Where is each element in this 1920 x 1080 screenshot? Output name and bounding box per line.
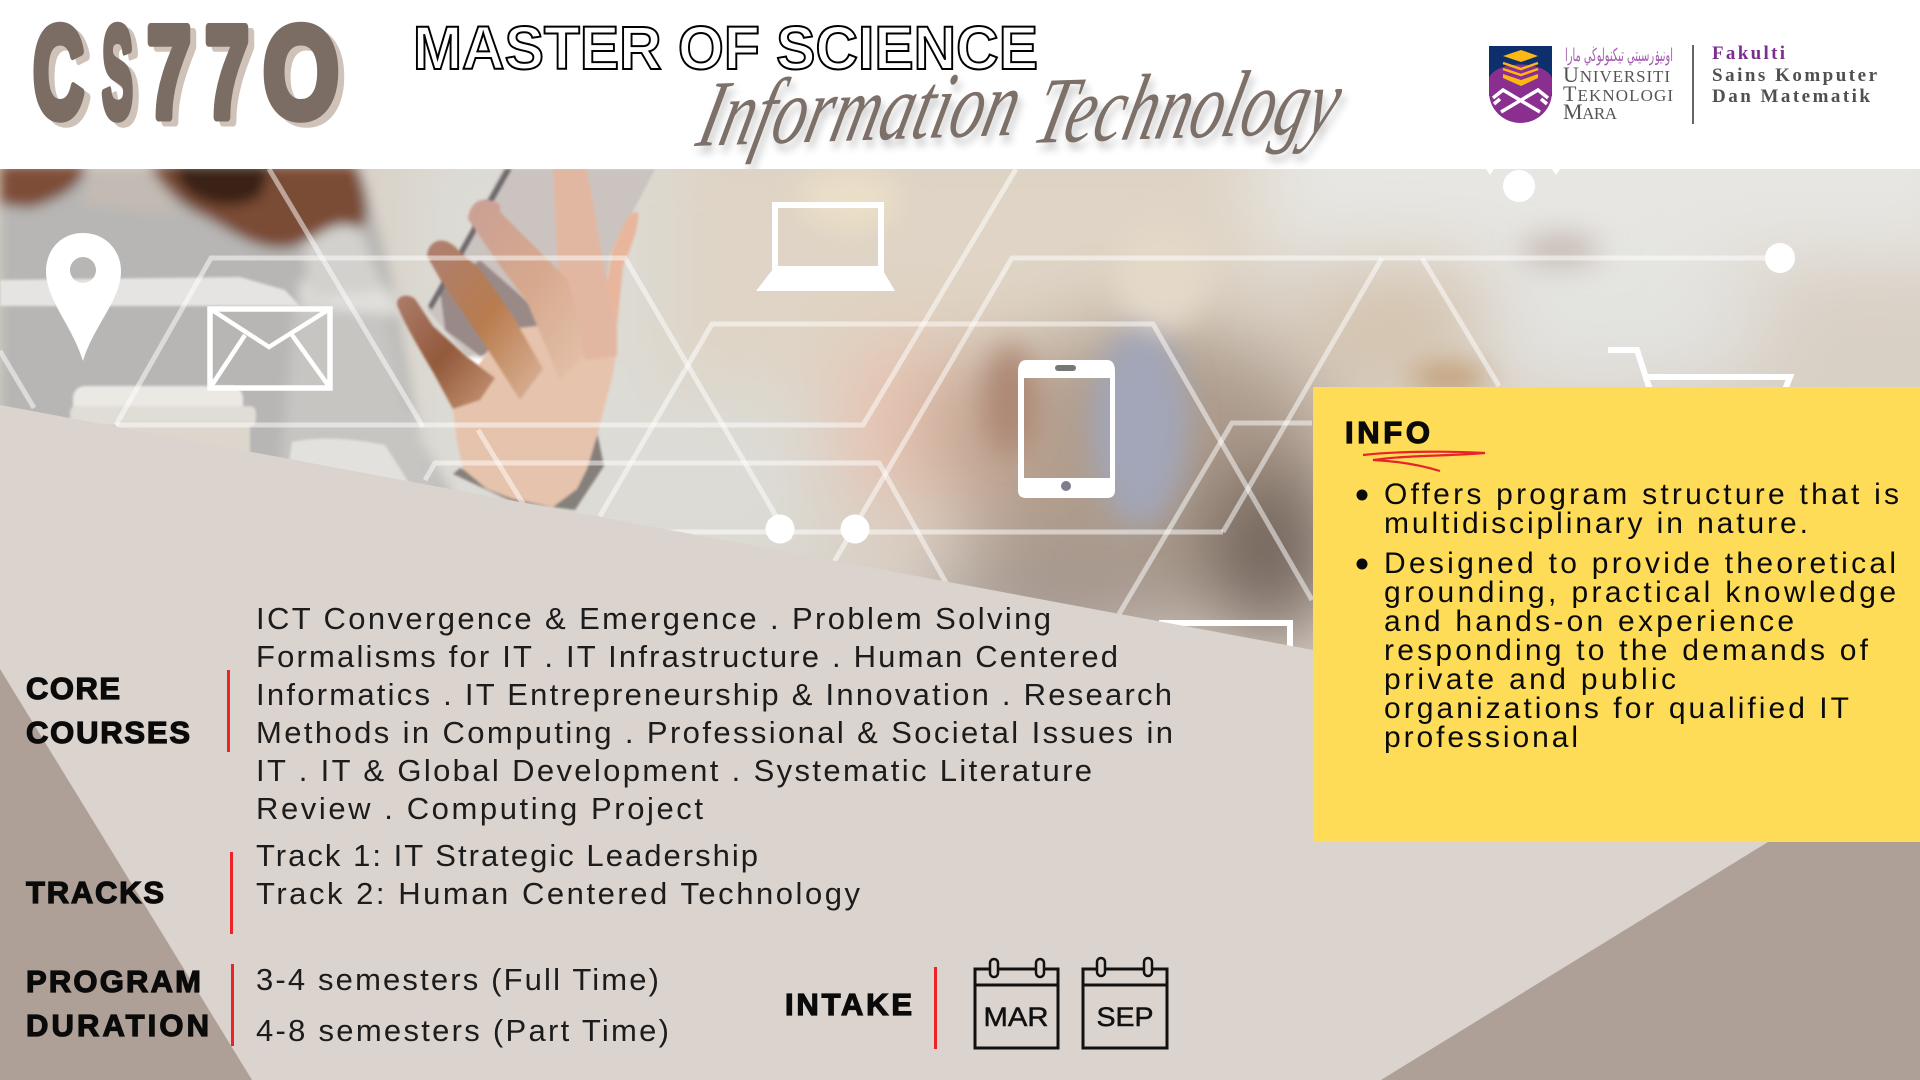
faculty name <box>1712 43 1878 107</box>
code title: CS770: 7 <box>205 0 249 145</box>
duration list: 3-4 semesters (Full Time) <box>256 962 659 997</box>
code title: CS770: S <box>102 0 133 145</box>
code title: CS770: 7 <box>147 0 191 145</box>
heading: program duration: PROGRAM <box>26 964 201 999</box>
sleeve cuff <box>453 432 604 510</box>
icon: calendar September: SEP <box>1096 1002 1154 1032</box>
heading: core courses: COURSES <box>26 715 190 750</box>
logo: UiTM and faculty <box>1489 43 1878 124</box>
faculty name: Sains Komputer <box>1712 65 1878 86</box>
scribble underline <box>1363 452 1485 471</box>
title: Information Technology: Technology <box>1025 48 1353 164</box>
icon: hidden screen <box>1159 620 1293 646</box>
course list <box>256 601 1173 826</box>
section: core courses <box>26 601 1173 826</box>
course list: IT . IT & Global Development . Systematic Literature <box>256 753 1092 788</box>
code title: CS770: C <box>39 4 90 150</box>
panel: dark triangle left <box>0 669 252 1080</box>
heading: program duration: DURATION <box>26 1008 209 1043</box>
code title: CS770: O <box>263 0 339 145</box>
panel: info box <box>1313 387 1920 842</box>
coffee cup <box>69 384 257 452</box>
bullet one <box>1356 478 1899 540</box>
section: tracks <box>26 838 860 934</box>
bullet one: multidisciplinary in nature. <box>1384 507 1808 540</box>
sweater and hair <box>0 169 453 490</box>
bullet one: Offers program structure that is <box>1384 478 1899 511</box>
panel: beige background <box>0 405 1920 1080</box>
university name in Arabic: اونيۏرسيتي تيكنولوڬي مارا <box>1565 45 1673 66</box>
network lines <box>0 169 1780 620</box>
code title: CS770: O <box>269 4 345 150</box>
icon: location pin <box>46 233 121 361</box>
code title: CS770 <box>33 0 345 150</box>
bullet two: grounding, practical knowledge <box>1384 576 1896 609</box>
icon: UiTM shield <box>1489 46 1552 123</box>
heading: core courses: CORE <box>26 671 120 706</box>
heading: tracks: TRACKS <box>26 875 164 910</box>
university name: TEKNOLOGI <box>1563 81 1673 106</box>
course list: Methods in Computing . Professional & Societal Issues in <box>256 715 1173 750</box>
title: Information Technology: Information <box>688 51 1033 167</box>
photo: hand with phone and network overlay <box>0 169 1920 650</box>
code title: CS770: S <box>108 4 139 150</box>
heading: info: INFO <box>1345 415 1430 450</box>
bullet two: organizations for qualified IT <box>1384 692 1849 725</box>
university name <box>1563 62 1673 124</box>
bullet two: Designed to provide theoretical <box>1384 547 1896 580</box>
university name: UNIVERSITI <box>1563 62 1670 87</box>
hand <box>397 169 638 510</box>
duration list: 4-8 semesters (Part Time) <box>256 1013 669 1048</box>
duration list <box>256 962 669 1048</box>
icon: calendar March <box>975 959 1058 1048</box>
section: program duration <box>26 962 669 1048</box>
code title: CS770: C <box>33 0 84 145</box>
header band <box>0 0 1920 169</box>
bullet two <box>1356 547 1896 754</box>
bullet two: responding to the demands of <box>1384 634 1869 667</box>
panel: dark triangle right <box>1381 842 1920 1080</box>
course list: ICT Convergence & Emergence . Problem Solving <box>256 601 1051 636</box>
faculty name: Dan Matematik <box>1712 86 1870 107</box>
bullet two: and hands-on experience <box>1384 605 1794 638</box>
icon: calendar September <box>1083 958 1167 1048</box>
code title: CS770: 7 <box>211 4 255 150</box>
track list <box>256 838 860 911</box>
blurred background <box>400 169 1920 650</box>
heading: core courses <box>26 671 190 750</box>
course list: Informatics . IT Entrepreneurship & Innovation . Research <box>256 677 1172 712</box>
track list: Track 1: IT Strategic Leadership <box>256 838 758 873</box>
icon: envelope <box>210 309 330 388</box>
track list: Track 2: Human Centered Technology <box>256 876 860 911</box>
university name: MARA <box>1563 99 1618 124</box>
icon: shopping cart <box>1608 350 1790 392</box>
icon: laptop <box>756 205 895 291</box>
title: Master of Science: MASTER OF SCIENCE <box>413 14 1038 82</box>
section: intake <box>785 958 1167 1049</box>
code title: CS770: 7 <box>153 4 197 150</box>
heading: intake: INTAKE <box>785 987 912 1022</box>
course list: Formalisms for IT . IT Infrastructure . Human Centered <box>256 639 1118 674</box>
faculty name: Fakulti <box>1712 43 1785 64</box>
bullet two: private and public <box>1384 663 1676 696</box>
bullet two: professional <box>1384 721 1578 754</box>
phone <box>427 169 655 366</box>
icon: calendar March: MAR <box>984 1002 1048 1032</box>
sweater stripes <box>0 276 408 481</box>
icon: tablet <box>1018 360 1115 498</box>
nodes <box>766 169 1795 544</box>
course list: Review . Computing Project <box>256 791 703 826</box>
heading: program duration <box>26 964 209 1043</box>
